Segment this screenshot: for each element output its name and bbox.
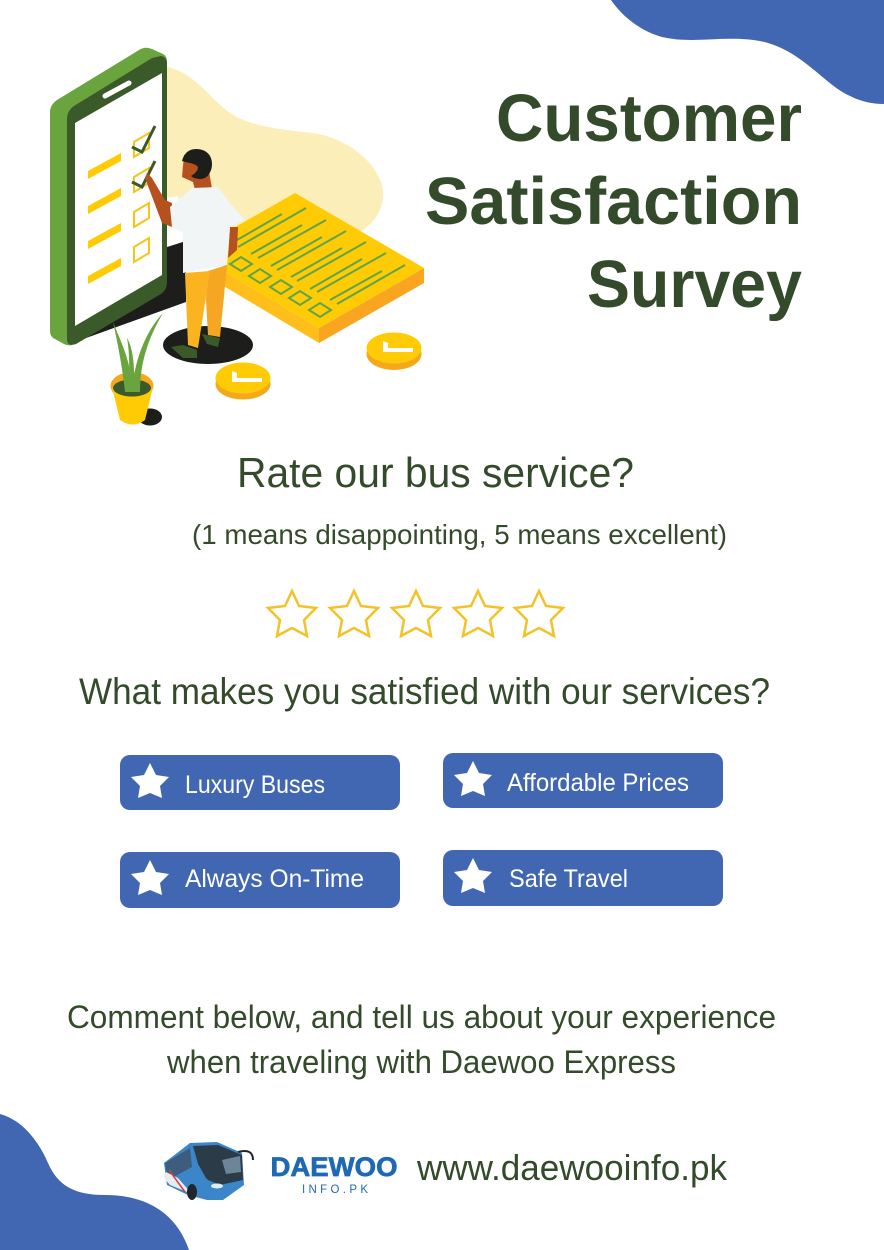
title [425, 81, 802, 322]
decorative blob: bottom left [0, 1114, 189, 1250]
logo: Daewoo Info.pk: DAEWOO [270, 1152, 398, 1182]
option button: Always On-Time: Always On-Time [185, 865, 364, 893]
pale yellow background shape [167, 67, 383, 270]
person [145, 149, 253, 364]
star rating row [268, 591, 563, 636]
coins [216, 332, 422, 400]
rating scale note: (1 means disappointing, 5 means excellent) [192, 519, 727, 550]
decorative blob: top right [611, 0, 884, 104]
option button: Safe Travel: Safe Travel [509, 865, 628, 893]
call to action text [67, 999, 776, 1080]
option button: Luxury Buses [120, 755, 400, 810]
potted plant [110, 313, 163, 426]
icon: blue bus [164, 1142, 253, 1200]
illustration: survey on phone [50, 48, 424, 425]
question heading: rate our service: Rate our bus service? [237, 449, 634, 496]
title: Survey [587, 247, 802, 322]
shadow behind phone [75, 241, 186, 342]
title: Customer [496, 81, 802, 156]
logo: Daewoo Info.pk [270, 1152, 398, 1196]
question heading: what satisfies you: What makes you satisfied with our services? [79, 671, 770, 712]
phone speaker slot [105, 83, 129, 96]
option button: Safe Travel [443, 850, 723, 906]
phone [50, 48, 167, 345]
yellow survey sheet [222, 193, 424, 343]
call to action text: when traveling with Daewoo Express [166, 1044, 676, 1080]
website address: www.daewooinfo.pk [416, 1147, 728, 1188]
call to action text: Comment below, and tell us about your experience [67, 999, 776, 1035]
white gap behind person [167, 196, 186, 250]
title: Satisfaction [425, 164, 802, 239]
option button: Affordable Prices [443, 753, 723, 808]
logo: Daewoo Info.pk: INFO.PK [302, 1184, 368, 1196]
option button: Luxury Buses: Luxury Buses [185, 771, 325, 799]
option button: Always On-Time [120, 852, 400, 908]
option button: Affordable Prices: Affordable Prices [507, 769, 689, 797]
